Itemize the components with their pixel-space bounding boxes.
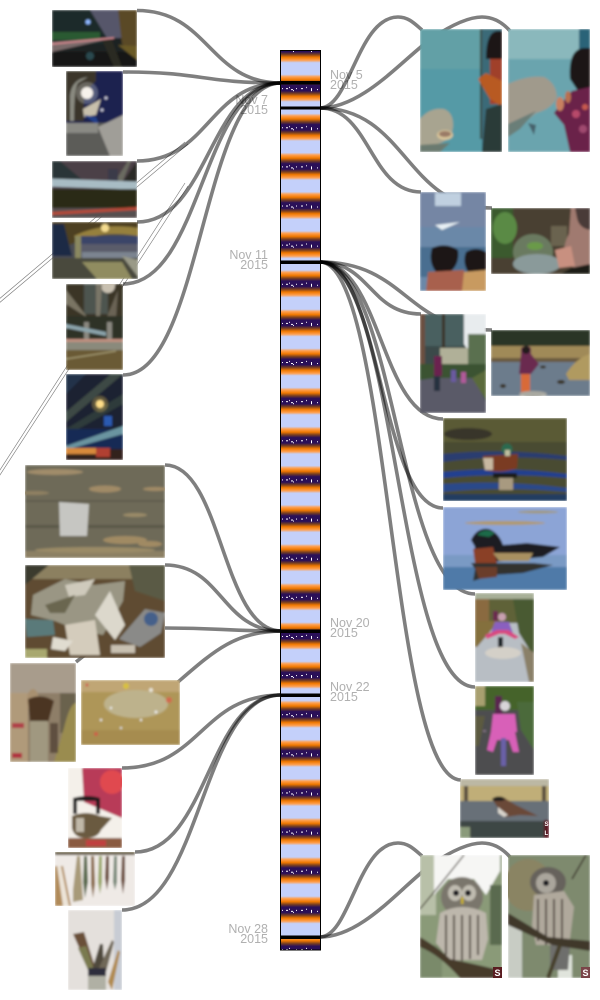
date label: Nov 22 2015: 2015: [330, 690, 358, 704]
photo: duck in dark water: [443, 418, 567, 501]
photo: chickadee: L: [544, 831, 548, 837]
connectors: Nov 22 group: [122, 695, 281, 910]
photo: kids watching whale: [420, 192, 486, 291]
connectors: Nov 28 group: [320, 843, 510, 937]
photo: chickadee: S: [544, 822, 549, 828]
photo: beluga and child: [508, 29, 590, 152]
photo: wood duck in blue water: [443, 507, 567, 590]
photo: family on forest path: [420, 314, 486, 413]
date label: Nov 20 2015: 2015: [330, 626, 358, 640]
date label: Nov 5 2015: Nov 5: [330, 68, 363, 82]
photo: brushes in jar: [68, 910, 122, 990]
photo: street lamp under overpass: [66, 374, 123, 460]
photo: overpass skateboarder: [66, 71, 123, 156]
photo: barred owl front: [420, 855, 502, 978]
photo: weathered wood with white square: [25, 465, 165, 558]
thin double lines: [0, 142, 188, 478]
connectors: Nov 7 group: [123, 10, 281, 375]
date label: Nov 28 2015: Nov 28: [228, 922, 268, 936]
photo: palette knives on wall: [55, 852, 135, 906]
photo: child on bike pink jacket: [475, 686, 534, 775]
date label: Nov 7 2015: 2015: [240, 103, 268, 117]
timeline bar: [280, 50, 320, 950]
photo: kettle and red painting: [68, 768, 122, 848]
date label: Nov 5 2015: 2015: [330, 78, 358, 92]
photo: barred owl front: S: [494, 968, 501, 978]
date label: Nov 11 2015: Nov 11: [229, 248, 268, 262]
photo: highway at dusk: [52, 161, 137, 218]
photo: paintbrush closeup: [10, 663, 76, 762]
photo: barred owl profile: [508, 855, 590, 978]
photo: chickadee: [460, 779, 549, 838]
photo: beluga with open mouth: [420, 29, 502, 152]
connectors: Nov 5 group: [320, 17, 510, 208]
photo: barred owl profile: S: [582, 968, 589, 978]
photo: paint spattered floor: [81, 680, 180, 745]
photo: interchange underside: [52, 222, 138, 279]
photo: girl feeding ducks: [491, 330, 590, 396]
date label: Nov 22 2015: Nov 22: [330, 680, 370, 694]
photo: child on bike in puddle: [475, 593, 534, 682]
connectors: Nov 20 group: [76, 465, 281, 682]
photo: child at terrarium: [491, 208, 590, 274]
connectors: Nov 11 group: [320, 262, 492, 780]
date label: Nov 28 2015: 2015: [240, 932, 268, 946]
date label: Nov 7 2015: Nov 7: [235, 93, 268, 107]
date label: Nov 11 2015: 2015: [240, 258, 268, 272]
date label: Nov 20 2015: Nov 20: [330, 616, 370, 630]
photo: under overpass looking up: [66, 284, 123, 370]
photo: paint scrap pile: [25, 565, 165, 658]
photo: night canal road: [52, 10, 137, 67]
